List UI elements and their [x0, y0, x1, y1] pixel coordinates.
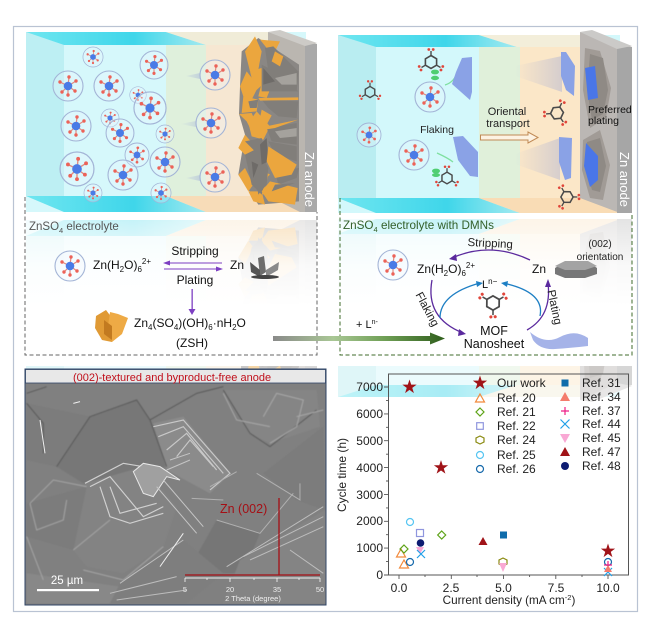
icon: hydrated zinc ion [55, 251, 85, 281]
legend: Ref. 21 [497, 405, 536, 419]
legend: Ref. 20 [497, 391, 536, 405]
legend: Ref. 37 [582, 404, 621, 418]
label: Zn: Zn [532, 262, 546, 276]
formula: hydrated zinc: 2+ [142, 257, 151, 266]
chart: XRD inset: 35 [273, 585, 281, 594]
x axis title: ) [571, 594, 575, 607]
scale bar [37, 575, 99, 591]
label: Preferred plating: plating [588, 115, 619, 127]
icon: trails toward anode [515, 56, 562, 180]
label: Ln-: L [482, 279, 488, 291]
heading: textured anode: (002)-textured and byproduct-free anode [73, 372, 271, 384]
cycle arrows [431, 250, 551, 336]
axis ticks [384, 387, 608, 579]
legend [473, 376, 621, 476]
icon: green interaction marks [431, 70, 458, 177]
legend: Ref. 34 [582, 390, 621, 404]
scale bar: 25 µm [51, 575, 83, 587]
label: + Ln-: n- [372, 319, 379, 326]
icon: hydrated zinc ions [53, 47, 230, 203]
heading: ZnSO4 electrolyte with DMNs: 4 [374, 225, 378, 234]
formula: ZSH: Zn [134, 316, 148, 330]
formula: ZSH: 6 [208, 323, 213, 332]
arrow: + Ln- additive [273, 332, 445, 344]
formula: hydrated zinc: O) [124, 258, 137, 272]
icon: dendrites and byproduct flakes [238, 36, 299, 205]
legend: Ref. 31 [582, 376, 621, 390]
formula: ZSH: 4 [174, 323, 179, 332]
y axis labels: 4000 [356, 461, 383, 475]
formula: hydrated zinc: Zn(H [93, 258, 120, 272]
label: Stripping: Stripping [467, 237, 513, 251]
icon: nanosheet [530, 332, 588, 349]
formula: ZSH: O [237, 316, 246, 330]
label: (002) orientation: orientation [577, 252, 623, 263]
header bar [26, 370, 326, 383]
x axis labels: 10.0 [596, 581, 620, 595]
label: Plating: Plating [544, 289, 563, 326]
chart: XRD inset: 20 [226, 585, 234, 594]
x axis labels: 7.5 [548, 581, 565, 595]
legend: Our work [497, 376, 547, 390]
heading: ZnSO4 electrolyte: ZnSO [29, 221, 59, 233]
legend: Ref. 22 [497, 419, 536, 433]
y axis labels: 0 [376, 568, 383, 582]
formula: hydrated zinc: 6 [461, 269, 466, 278]
legend: Ref. 26 [497, 462, 536, 476]
formula: ZSH: (SO [152, 316, 174, 330]
label: Ln-: n− [488, 277, 498, 286]
y axis labels [356, 380, 383, 582]
formula: hydrated zinc: 2+ [466, 261, 475, 270]
panel: DMN reaction scheme [340, 198, 632, 355]
icon: molecules [359, 48, 582, 211]
heading: ZnSO4 electrolyte: 4 [59, 226, 63, 235]
icon: ZSH flake [95, 310, 128, 342]
legend: Ref. 45 [582, 431, 621, 445]
formula: ZSH: 4 [148, 323, 153, 332]
chart: XRD inset [183, 498, 324, 603]
label: Oriental transport: transport [486, 118, 530, 130]
label: + Ln-: + L [356, 319, 372, 331]
panel: SEM image [25, 369, 326, 605]
formula: ZSH: )(OH) [178, 316, 208, 330]
x axis title: Current density (mA cm [443, 594, 565, 607]
chart: cycle time versus current density [335, 374, 628, 607]
x axis labels: 5.0 [495, 581, 512, 595]
chart: XRD inset: 5 [183, 585, 187, 594]
y axis labels: 2000 [356, 514, 383, 528]
label: (ZSH): (ZSH) [176, 336, 208, 350]
label: Flaking: Flaking [420, 124, 454, 136]
heading: ZnSO4 electrolyte with DMNs: electrolyte with DMNs [378, 219, 494, 232]
icon: zinc hexagonal stack [555, 261, 597, 278]
x axis labels: 2.5 [443, 581, 460, 595]
label: MOF Nanosheet: Nanosheet [464, 337, 525, 351]
legend: Ref. 48 [582, 459, 621, 473]
formula: hydrated zinc: 2 [444, 269, 449, 278]
label: Preferred plating: Preferred [588, 104, 632, 116]
label: Zn: Zn [230, 258, 244, 272]
legend: Ref. 47 [582, 445, 621, 459]
SEM texture [27, 387, 325, 603]
x axis labels [391, 581, 620, 595]
formula: hydrated zinc: Zn(H [417, 262, 444, 276]
formula: hydrated zinc: 6 [137, 265, 142, 274]
panel: ZnSO4 reaction scheme [25, 197, 317, 355]
legend: Ref. 44 [582, 417, 621, 431]
chart: XRD inset: 50 [316, 585, 324, 594]
label: Stripping: Stripping [171, 244, 219, 258]
label: Oriental transport: Oriental [488, 106, 526, 118]
x axis title: -2 [565, 593, 571, 602]
icon: zinc dendrite [250, 256, 279, 279]
heading: ZnSO4 electrolyte with DMNs: ZnSO [343, 219, 374, 232]
label: MOF Nanosheet: MOF [480, 324, 508, 338]
label: Flaking: Flaking [413, 290, 441, 329]
formula: ZSH: 2 [232, 323, 237, 332]
legend: Ref. 24 [497, 433, 536, 447]
icon: hydrated zinc ion [378, 250, 408, 280]
panel: ZnSO4 electrolyte cell [26, 30, 317, 212]
formula: hydrated zinc: 2 [120, 265, 125, 274]
icon: MOF nanosheets [452, 52, 598, 187]
formula: hydrated zinc: O) [448, 262, 461, 276]
x axis labels: 0.0 [391, 581, 408, 595]
label: Plating: Plating [177, 273, 213, 287]
y axis title: Cycle time (h) [335, 438, 349, 512]
legend: Ref. 25 [497, 448, 536, 462]
panel: ZnSO4 electrolyte with DMNs cell [338, 30, 632, 213]
y axis labels: 3000 [356, 488, 383, 502]
arrow: oriental transport [480, 132, 538, 143]
arrow: stripping and plating [163, 260, 223, 272]
label: Zn anode: Zn anode [617, 152, 632, 207]
label: Zn anode: Zn anode [302, 152, 317, 207]
label: (002) orientation: (002) [588, 239, 612, 250]
formula: ZSH: ·nH [213, 316, 232, 330]
y axis labels: 1000 [356, 541, 383, 555]
data points [396, 380, 615, 576]
heading: ZnSO4 electrolyte: electrolyte [63, 221, 119, 233]
y axis labels: 6000 [356, 407, 383, 421]
icon: hydrated zinc ions [357, 82, 445, 170]
label: Zn (002): Zn (002) [220, 502, 267, 516]
arrow: byproduct formation [188, 289, 196, 315]
y axis labels: 7000 [356, 380, 383, 394]
chart: XRD inset: 2 Theta (degree) [225, 594, 281, 603]
icon: ligand molecule [477, 283, 514, 321]
panel: reflections of the electrolyte cells [14, 216, 637, 402]
y axis labels: 5000 [356, 434, 383, 448]
